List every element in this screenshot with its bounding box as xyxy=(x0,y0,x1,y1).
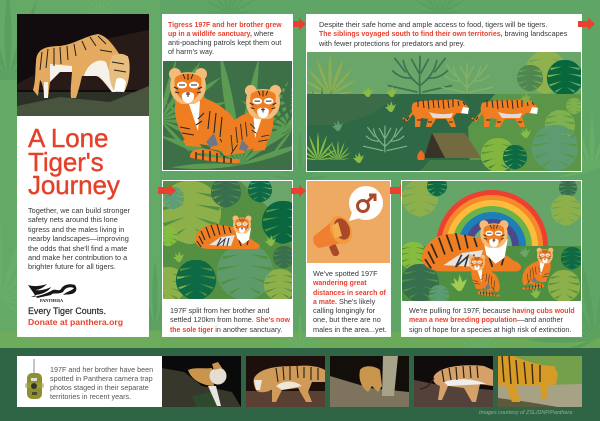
intro text: and make her contribution to a xyxy=(28,253,127,262)
arrow: panel 4 to 5 xyxy=(390,184,401,197)
illustration: megaphone xyxy=(307,181,390,263)
photo: camera trap 1 xyxy=(162,356,241,407)
illustration: two tigers xyxy=(163,61,292,170)
title: Tiger's xyxy=(28,147,104,177)
caption: of harm's way. xyxy=(168,47,214,56)
photo: camera trap 2 xyxy=(246,356,325,407)
arrow: panel 1 to 2 xyxy=(293,18,306,30)
photo: camera trap 3 xyxy=(330,356,409,407)
caption: one, but there are no xyxy=(313,315,381,324)
caption xyxy=(319,20,568,48)
caption: mean a new breeding population—and another xyxy=(409,315,563,324)
caption: sign of hope for a species at high risk of extinction. xyxy=(409,325,571,334)
caption: settled 120km from home. She's now xyxy=(170,315,290,324)
caption: anti-poaching patrols kept them out xyxy=(168,38,281,47)
caption: 197F split from her brother and xyxy=(170,306,270,315)
caption: up in a wildlife sanctuary, where xyxy=(168,29,274,38)
caption: We're pulling for 197F, because having cubs would xyxy=(409,306,575,315)
call to action: Donate at panthera.org xyxy=(28,317,123,327)
intro text: tigress and the males living in xyxy=(28,225,124,234)
photo: camera trap 4 xyxy=(414,356,493,407)
icon: camera trap xyxy=(25,359,44,399)
arrow: panel 2 to 3 xyxy=(578,18,595,30)
intro text xyxy=(28,206,130,271)
caption: wandering great xyxy=(313,280,367,287)
caption xyxy=(50,364,153,401)
caption xyxy=(409,306,575,334)
arrow: panel 3 entry xyxy=(158,184,176,197)
intro text: nearby landscapes—improving xyxy=(28,234,129,243)
intro text: the odds that she'll find a mate xyxy=(28,244,127,253)
title: Journey xyxy=(28,170,120,200)
photo: tiger at night xyxy=(17,14,149,116)
call to action xyxy=(28,306,123,327)
panel: sole tiger xyxy=(162,180,293,337)
title xyxy=(28,123,120,200)
caption: We've spotted 197F xyxy=(313,269,378,278)
caption: calling longingly for xyxy=(313,306,375,315)
logo: Panthera xyxy=(28,284,76,303)
illustration: rainbow and cubs xyxy=(402,181,581,301)
caption: Despite their safe home and ample access to food, tigers will be tigers. xyxy=(319,20,547,29)
panel: grew up in sanctuary xyxy=(162,14,293,171)
caption: 197F and her brother have been xyxy=(50,364,153,374)
caption: spotted in Panthera camera trap xyxy=(50,374,153,383)
illustration: walking tigers xyxy=(307,52,581,171)
caption xyxy=(170,306,290,334)
caption: a mate. She's likely xyxy=(313,297,375,306)
panel: breeding population xyxy=(401,180,582,337)
panel: camera trap caption xyxy=(17,356,162,407)
caption: photos staged in their separate xyxy=(50,383,149,392)
caption: males in the area...yet. xyxy=(313,325,387,334)
call to action: Every Tiger Counts. xyxy=(28,306,106,316)
panel: searching for a mate xyxy=(306,180,391,337)
caption: the sole tiger in another sanctuary. xyxy=(170,325,282,334)
caption: distances in search of xyxy=(313,290,386,297)
caption: Tigress 197F and her brother grew xyxy=(168,22,282,28)
intro text: Together, we can build stronger xyxy=(28,206,130,215)
caption: territories in recent years. xyxy=(50,392,131,401)
intro text: brighter future for all tigers. xyxy=(28,262,116,271)
logo: Panthera: PANTHERA xyxy=(40,298,63,303)
caption xyxy=(313,269,387,334)
caption: The siblings voyaged south to find their own territories, braving landscapes xyxy=(319,29,567,38)
image credit: Images courtesy of ZSL/DNP/Panthera xyxy=(479,410,572,416)
caption xyxy=(168,22,282,56)
photo: camera trap 5 xyxy=(498,356,582,407)
title: A Lone xyxy=(28,123,108,153)
caption: with fewer protections for predators and prey. xyxy=(319,39,465,48)
arrow: panel 3 to 4 xyxy=(291,185,306,197)
intro text: safety nets around this lone xyxy=(28,215,118,224)
panel: siblings voyaged south xyxy=(306,14,582,172)
illustration: resting tiger xyxy=(163,181,292,299)
panel: intro xyxy=(17,14,149,337)
